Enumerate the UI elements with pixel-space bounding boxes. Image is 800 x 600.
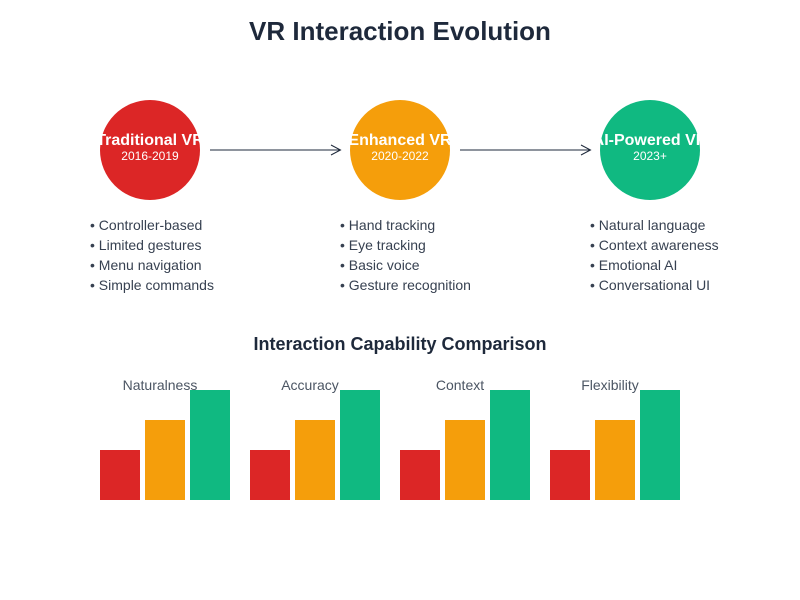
title: VR Interaction Evolution [249, 16, 551, 46]
feature list: Enhanced VR: • Gesture recognition [340, 277, 471, 293]
stage years: 2023+: 2023+ [633, 149, 667, 163]
arrow: Enhanced to AI-Powered [460, 144, 592, 156]
stage years: 2020-2022: 2020-2022 [371, 149, 429, 163]
stage: Traditional VR [96, 100, 204, 200]
stage: AI-Powered VR [593, 100, 707, 200]
feature list: AI-Powered VR: • Context awareness [590, 237, 719, 253]
stage name: Traditional VR: Traditional VR [96, 132, 204, 149]
feature list: Traditional VR: • Controller-based [90, 217, 202, 233]
feature list: AI-Powered VR: • Conversational UI [590, 277, 710, 293]
feature list: Enhanced VR: • Eye tracking [340, 237, 426, 253]
bar group: Naturalness [100, 377, 230, 500]
stage: Enhanced VR [348, 100, 452, 200]
feature list: Traditional VR: • Menu navigation [90, 257, 202, 273]
bar group: Accuracy [250, 377, 380, 500]
feature list: Traditional VR: • Limited gestures [90, 237, 202, 253]
feature list: Enhanced VR [340, 217, 471, 293]
bar group: Flexibility [550, 377, 680, 500]
arrow: Traditional to Enhanced [210, 144, 342, 156]
feature list: AI-Powered VR: • Emotional AI [590, 257, 677, 273]
stage years: 2016-2019: 2016-2019 [121, 149, 179, 163]
feature list: AI-Powered VR [590, 217, 719, 293]
feature list: Enhanced VR: • Basic voice [340, 257, 420, 273]
bar label: Flexibility: Flexibility [581, 377, 639, 393]
bar label: Context: Context [436, 377, 484, 393]
stage name: Enhanced VR: Enhanced VR [348, 132, 452, 149]
bar group: Context [400, 377, 530, 500]
feature list: AI-Powered VR: • Natural language [590, 217, 705, 233]
bar label: Naturalness: Naturalness [123, 377, 197, 393]
feature list: Traditional VR: • Simple commands [90, 277, 214, 293]
circle: Enhanced VR [350, 100, 450, 200]
stage name: AI-Powered VR: AI-Powered VR [593, 132, 707, 149]
bar label: Accuracy: Accuracy [281, 377, 339, 393]
chart heading: Interaction Capability Comparison [253, 334, 547, 354]
feature list: Enhanced VR: • Hand tracking [340, 217, 435, 233]
circle: AI-Powered VR [600, 100, 700, 200]
circle: Traditional VR [100, 100, 200, 200]
feature list: Traditional VR [90, 217, 214, 293]
